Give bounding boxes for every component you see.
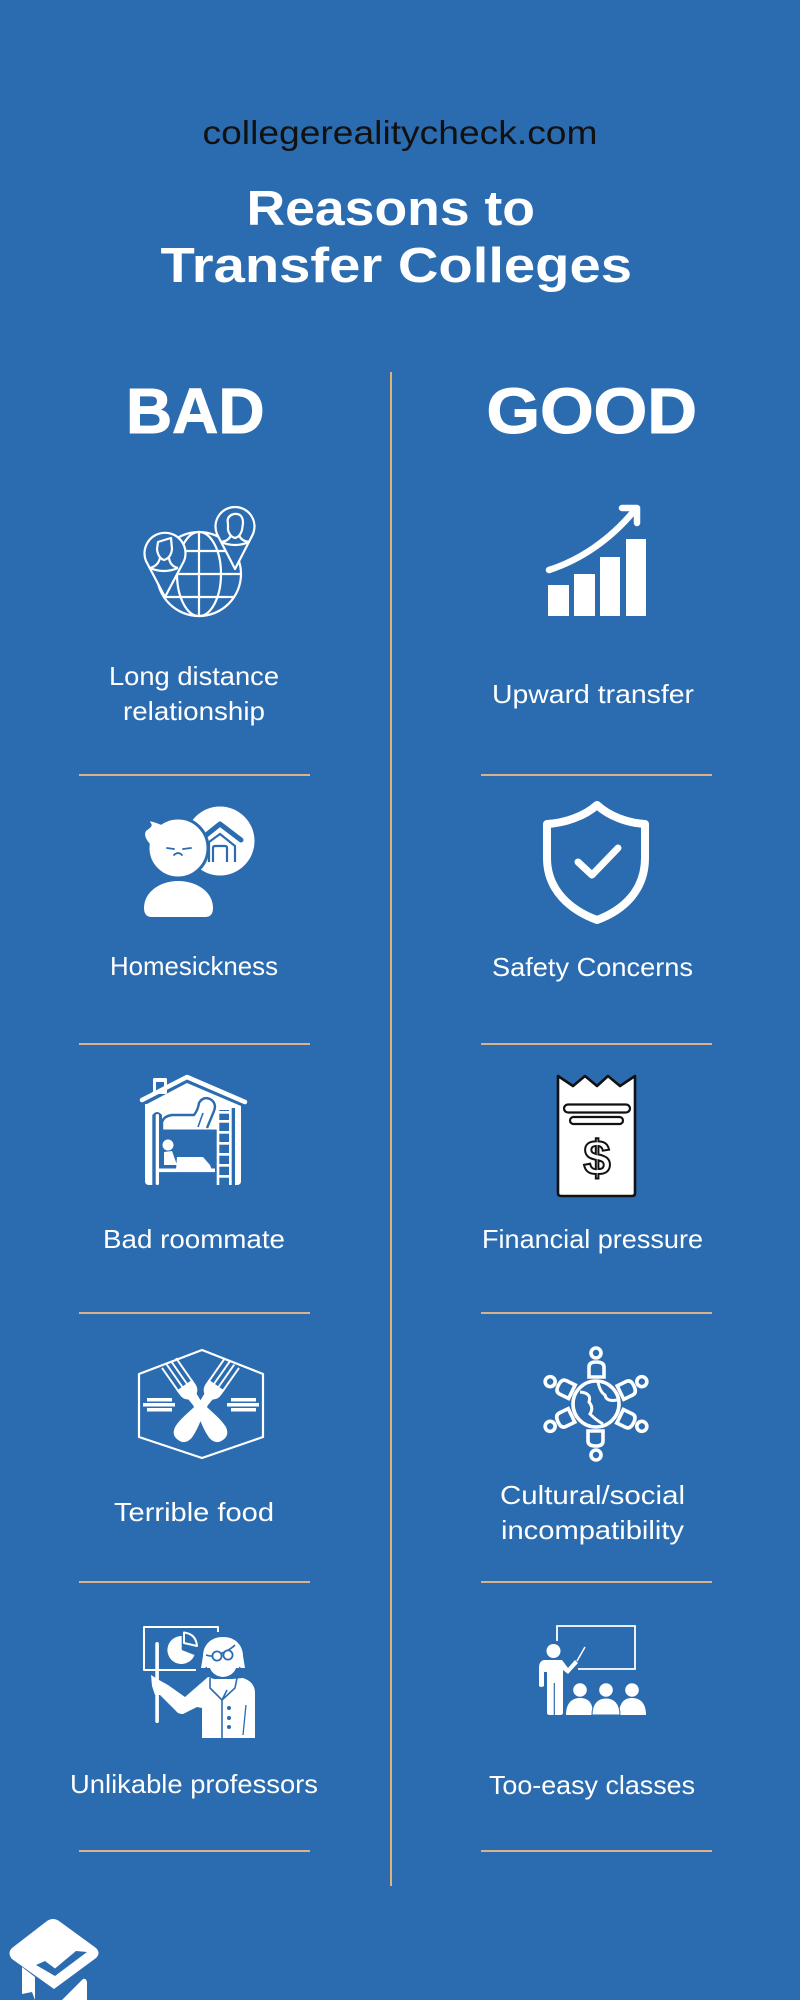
heading: bad: BAD <box>126 375 264 447</box>
icon: receipt with dollar sign: $ <box>583 1132 611 1186</box>
label: financial pressure: Financial pressure <box>482 1224 703 1254</box>
icon: bunk bed in house <box>142 1077 245 1185</box>
label: homesickness: Homesickness <box>110 951 278 981</box>
icon: professor presenting chart <box>144 1627 255 1738</box>
label: cultural/social incompatibility: Cultural/social <box>500 1480 685 1510</box>
label: long distance relationship <box>109 661 279 726</box>
title: Transfer Colleges <box>160 239 632 293</box>
label: upward transfer: Upward transfer <box>492 679 694 709</box>
icon: shield with check mark <box>547 805 645 920</box>
icon: teacher and students <box>539 1626 646 1715</box>
icon: people around a globe <box>542 1348 650 1460</box>
center divider <box>390 372 392 1886</box>
logo: graduation cap with check <box>10 1919 98 2000</box>
label: unlikable professors: Unlikable professors <box>70 1769 318 1799</box>
label: terrible food: Terrible food <box>114 1497 274 1527</box>
icon: homesick student with house <box>144 806 254 917</box>
icon: upward bar chart with arrow <box>548 508 646 616</box>
label: long distance relationship: Long distance <box>109 661 279 691</box>
icon: receipt with dollar sign <box>558 1076 635 1196</box>
title <box>160 182 632 293</box>
label: cultural/social incompatibility: incompatibility <box>501 1515 684 1545</box>
label: bad roommate: Bad roommate <box>103 1224 285 1254</box>
icon: crossed forks in hexagon <box>139 1350 263 1458</box>
label: too-easy classes: Too-easy classes <box>489 1770 695 1800</box>
icon: globe with two map pins <box>144 507 254 616</box>
heading: good: GOOD <box>486 375 697 447</box>
website url: collegerealitycheck.com <box>202 114 598 151</box>
label: cultural/social incompatibility <box>500 1480 685 1545</box>
label: long distance relationship: relationship <box>123 696 265 726</box>
label: safety concerns: Safety Concerns <box>492 952 693 982</box>
title: Reasons to <box>246 182 535 236</box>
